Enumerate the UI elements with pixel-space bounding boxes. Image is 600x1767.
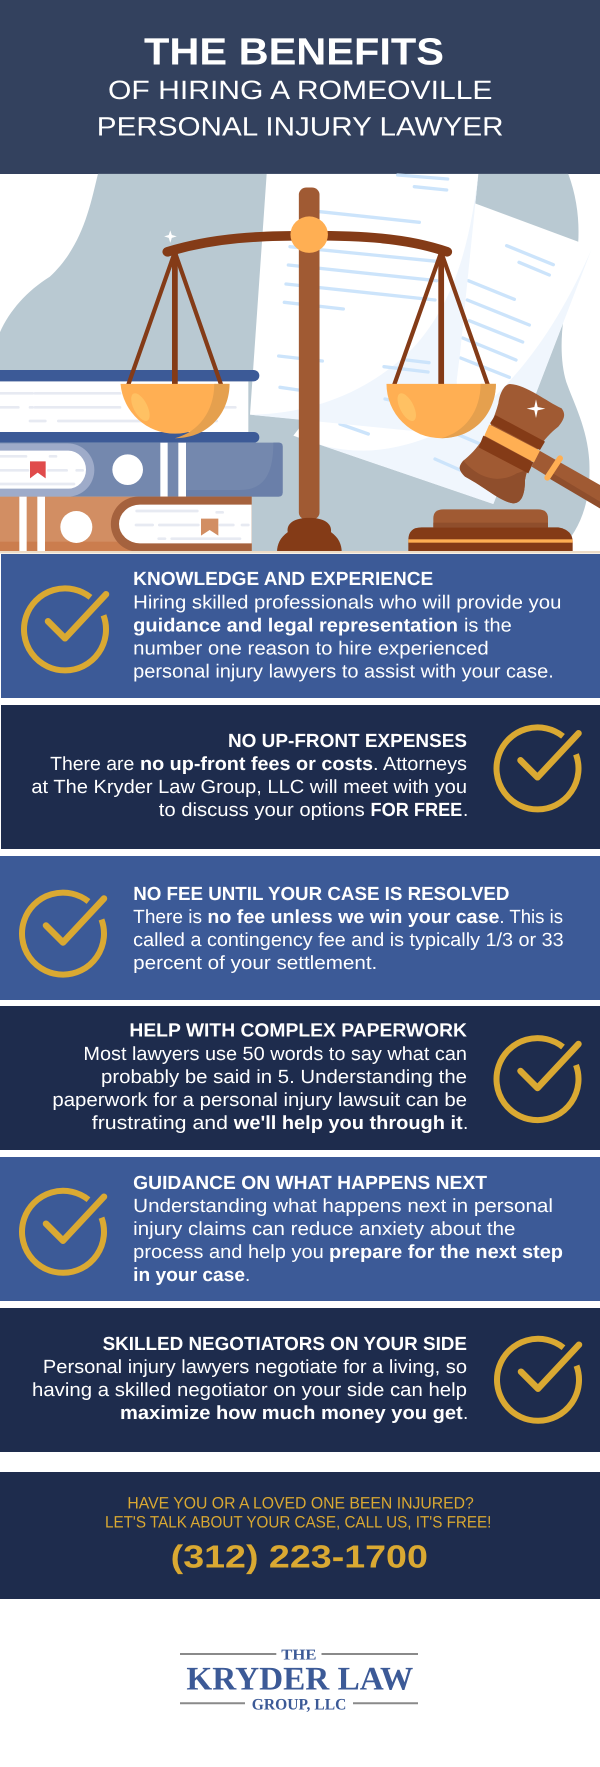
body text: no up-front expenses: FOR FREE	[370, 800, 462, 821]
body text: skilled negotiators on your side: .	[463, 1403, 468, 1424]
body text: help with complex paperwork	[52, 1044, 468, 1134]
scales of justice	[121, 187, 496, 552]
body text: no up-front expenses: no up-front fees or costs	[140, 754, 373, 775]
icon: gold check circle	[497, 727, 579, 809]
body text: no fee until your case is resolved: percent of your settlement.	[133, 953, 377, 974]
illustration: scales of justice, books, gavel and documents	[0, 174, 600, 554]
body text: knowledge and experience: Hiring skilled professionals who will provide you	[133, 592, 561, 613]
call to action text	[105, 1494, 491, 1531]
body text: skilled negotiators on your side: having a skilled negotiator on your side can help	[32, 1380, 467, 1401]
body text: no up-front expenses	[31, 754, 468, 821]
body text: knowledge and experience: guidance and legal representation	[133, 615, 458, 636]
body text: help with complex paperwork: Most lawyers use 50 words to say what can	[83, 1044, 467, 1065]
logo: The Kryder Law Group, LLC: GROUP, LLC	[252, 1696, 346, 1713]
icon: gold check circle	[22, 1191, 104, 1273]
body text: knowledge and experience: number one reason to hire experienced	[133, 638, 489, 659]
body text: guidance on what happens next	[133, 1196, 563, 1286]
panel: guidance on what happens next	[0, 1157, 600, 1301]
body text: knowledge and experience: is the	[464, 615, 512, 636]
body text: help with complex paperwork: frustrating and	[92, 1113, 228, 1134]
body text: no up-front expenses: There are	[50, 754, 134, 775]
books stack	[0, 370, 283, 552]
panel: knowledge and experience	[1, 554, 600, 698]
body text: skilled negotiators on your side: maximize how much money you get	[120, 1403, 463, 1424]
body text: no up-front expenses: .	[463, 800, 468, 821]
heading: no fee until your case is resolved: NO FEE UNTIL YOUR CASE IS RESOLVED	[133, 884, 509, 905]
icon: gold check circle	[24, 588, 106, 670]
title banner	[0, 0, 600, 174]
body text: no up-front expenses: . Attorneys	[373, 754, 467, 775]
body text: guidance on what happens next: process and help you	[133, 1242, 324, 1263]
icon: gold check circle	[497, 1038, 579, 1120]
body text: no fee until your case is resolved: There is	[133, 907, 202, 928]
panel: no up-front expenses	[1, 705, 600, 849]
title banner: OF HIRING A ROMEOVILLE	[108, 75, 492, 105]
body text: no fee until your case is resolved	[133, 907, 564, 974]
body text: skilled negotiators on your side: Personal injury lawyers negotiate for a living, so	[43, 1357, 467, 1378]
body text: no up-front expenses: at The Kryder Law Group, LLC will meet with you	[31, 777, 467, 798]
body text: guidance on what happens next: .	[245, 1265, 250, 1286]
phone number: (312) 223-1700	[171, 1538, 428, 1574]
body text: guidance on what happens next: Understanding what happens next in personal	[133, 1196, 553, 1217]
call to action text: LET'S TALK ABOUT YOUR CASE, CALL US, IT'S FREE!	[105, 1513, 491, 1531]
body text: guidance on what happens next: prepare for the next step	[329, 1242, 563, 1263]
body text: knowledge and experience: personal injury lawyers to assist with your case.	[133, 661, 554, 682]
icon: gold check circle	[497, 1339, 579, 1421]
heading: knowledge and experience: KNOWLEDGE AND EXPERIENCE	[133, 569, 433, 590]
body text: guidance on what happens next: in your case	[133, 1265, 245, 1286]
panel: help with complex paperwork	[0, 1006, 600, 1150]
body text: no up-front expenses: to discuss your options	[159, 800, 365, 821]
panel: skilled negotiators on your side	[0, 1308, 600, 1452]
logo: The Kryder Law Group, LLC	[180, 1647, 418, 1713]
title banner: PERSONAL INJURY LAWYER	[97, 112, 504, 142]
gavel and sound block	[408, 384, 600, 551]
heading: no up-front expenses: NO UP-FRONT EXPENSES	[228, 731, 467, 752]
heading: guidance on what happens next: GUIDANCE ON WHAT HAPPENS NEXT	[133, 1173, 487, 1194]
call to action text: HAVE YOU OR A LOVED ONE BEEN INJURED?	[127, 1494, 474, 1512]
icon: gold check circle	[22, 893, 104, 975]
body text: help with complex paperwork: .	[463, 1113, 468, 1134]
call to action band	[0, 1472, 600, 1599]
body text: no fee until your case is resolved: no fee unless we win your case	[207, 907, 499, 928]
body text: help with complex paperwork: paperwork for a personal injury lawsuit can be	[52, 1090, 467, 1111]
title banner: THE BENEFITS	[144, 32, 444, 74]
body text: help with complex paperwork: probably be said in 5. Understanding the	[101, 1067, 467, 1088]
logo: The Kryder Law Group, LLC: THE	[281, 1647, 316, 1663]
body text: no fee until your case is resolved: . This is	[499, 907, 563, 928]
logo: The Kryder Law Group, LLC: KRYDER LAW	[186, 1661, 413, 1697]
body text: knowledge and experience	[133, 592, 561, 682]
body text: guidance on what happens next: injury claims can reduce anxiety about the	[133, 1219, 515, 1240]
heading: skilled negotiators on your side: SKILLED NEGOTIATORS ON YOUR SIDE	[103, 1334, 467, 1355]
body text: skilled negotiators on your side	[32, 1357, 468, 1424]
body text: no fee until your case is resolved: called a contingency fee and is typically 1/3 or 33	[133, 930, 564, 951]
heading: help with complex paperwork: HELP WITH COMPLEX PAPERWORK	[129, 1021, 467, 1042]
body text: help with complex paperwork: we'll help you through it	[233, 1113, 463, 1134]
panel: no fee until your case is resolved	[0, 856, 600, 1000]
